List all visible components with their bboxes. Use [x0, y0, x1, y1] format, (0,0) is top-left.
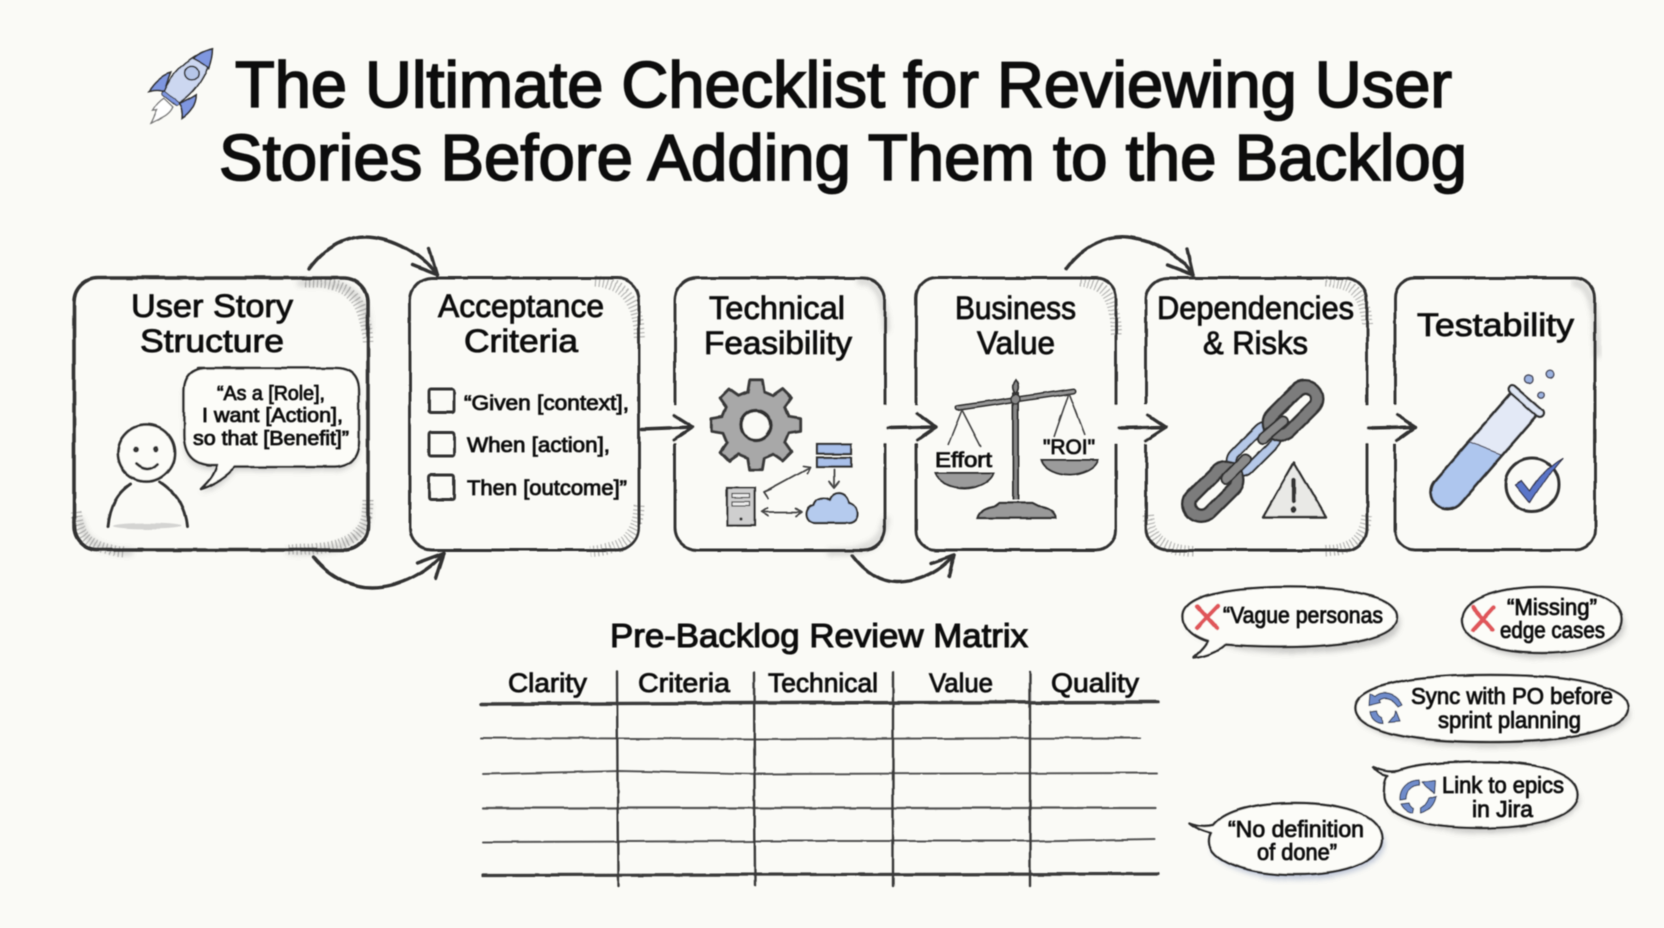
panel: acceptance criteria [410, 278, 640, 551]
heading: dependencies and risks [1157, 290, 1354, 361]
callout text: no definition of done: of done” [1257, 839, 1337, 865]
heading: business value: Business [955, 290, 1076, 326]
heading: technical feasibility [704, 290, 852, 361]
callout: no definition of done [1189, 803, 1385, 880]
arrow: story to acceptance, top arc [309, 237, 437, 275]
arrow: technical to business, bottom arc [852, 555, 954, 582]
text layer [131, 48, 1613, 865]
callout text: missing edge cases: edge cases [1500, 617, 1605, 643]
callout text: no definition of done: “No definition [1228, 816, 1364, 842]
callout text: link to epics [1442, 772, 1564, 822]
arrow: business to dependencies, top arc [1066, 237, 1193, 275]
text: criteria list [464, 392, 629, 500]
title: Stories Before Adding Them to the Backlog [219, 121, 1467, 194]
matrix column headers: Criteria [638, 668, 731, 698]
callout text: missing edge cases [1500, 594, 1605, 643]
callout text: vague personas: “Vague personas [1223, 602, 1383, 628]
matrix grid [481, 672, 1158, 886]
checkbox 1 [429, 389, 454, 413]
icon: warning triangle [1263, 462, 1326, 517]
text: criteria list: Then [outcome]” [467, 477, 627, 500]
callout text: missing edge cases: “Missing” [1507, 594, 1597, 620]
checkbox 2 [429, 432, 454, 456]
icon: gear [711, 380, 801, 470]
heading: acceptance criteria [438, 288, 604, 359]
icon: database [817, 444, 851, 467]
text: criteria list: When [action], [467, 434, 610, 457]
heading: acceptance criteria: Acceptance [438, 288, 604, 324]
panel: technical feasibility [675, 278, 886, 552]
icon: sync arrows [1369, 693, 1402, 723]
title: The Ultimate Checklist for Reviewing User [235, 48, 1452, 121]
text: criteria list: “Given [context], [464, 392, 629, 415]
callout text: link to epics: in Jira [1472, 796, 1533, 822]
heading: dependencies and risks: & Risks [1203, 325, 1308, 361]
callout: missing edge cases [1462, 587, 1625, 658]
matrix column headers: Technical [768, 668, 878, 698]
speech bubble: story template [184, 368, 359, 493]
callout text: no definition of done [1228, 816, 1364, 865]
arrow: business to dependencies [1112, 405, 1166, 443]
callout text: sync with PO: Sync with PO before [1411, 683, 1613, 709]
icon: cloud [807, 493, 858, 523]
heading: business value [955, 290, 1076, 361]
arrow: story to acceptance, bottom arc [313, 553, 444, 588]
matrix column headers: Clarity [508, 668, 588, 698]
callout text: sync with PO: sprint planning [1438, 707, 1581, 733]
heading: review matrix: Pre-Backlog Review Matrix [610, 617, 1029, 654]
text: story template: I want [Action], [202, 405, 343, 427]
panel: business value [916, 278, 1116, 550]
checkbox 3 [429, 475, 454, 499]
icon: test tube [1420, 384, 1546, 519]
icon: balance scale [935, 380, 1098, 518]
matrix column headers: Value [929, 668, 993, 698]
heading: user story structure: User Story [131, 288, 293, 324]
icon: bubbles [1526, 370, 1554, 398]
icon: check circle [1506, 458, 1562, 512]
connector arrows [762, 466, 839, 516]
heading: acceptance criteria: Criteria [464, 323, 578, 359]
icon: link cycle arrows [1400, 780, 1436, 813]
callout: vague personas [1183, 587, 1400, 658]
title [219, 48, 1467, 194]
heading: technical feasibility: Technical [709, 290, 845, 326]
matrix column headers [508, 668, 1140, 698]
panel: testability [1395, 278, 1597, 550]
panel: user story structure [74, 278, 368, 552]
heading: dependencies and risks: Dependencies [1157, 290, 1354, 326]
icon: smiling person [108, 424, 187, 529]
callout text: sync with PO [1411, 683, 1613, 733]
heading: user story structure [131, 288, 293, 359]
text: story template: “As a [Role], [217, 383, 325, 405]
heading: user story structure: Structure [140, 323, 284, 359]
icon: chain [1185, 382, 1322, 521]
callout: link to epics [1373, 762, 1580, 833]
icon: rocket [149, 49, 212, 123]
heading: testability: Testability [1417, 307, 1574, 343]
heading: technical feasibility: Feasibility [704, 325, 852, 361]
arrow: dependencies to testability [1363, 405, 1415, 443]
heading: business value: Value [977, 325, 1055, 361]
scale label: ROI: "ROI" [1043, 436, 1095, 459]
arrow: technical to business [882, 405, 936, 443]
icon: server [727, 488, 755, 526]
callout: sync with PO [1355, 675, 1630, 747]
scale label: effort: Effort [935, 449, 992, 472]
callout text: link to epics: Link to epics [1442, 772, 1564, 798]
text: story template [193, 383, 349, 450]
matrix column headers: Quality [1051, 668, 1140, 698]
panel: dependencies and risks [1146, 278, 1367, 551]
arrow: acceptance to technical [642, 405, 693, 443]
text: story template: so that [Benefit]” [193, 428, 349, 450]
